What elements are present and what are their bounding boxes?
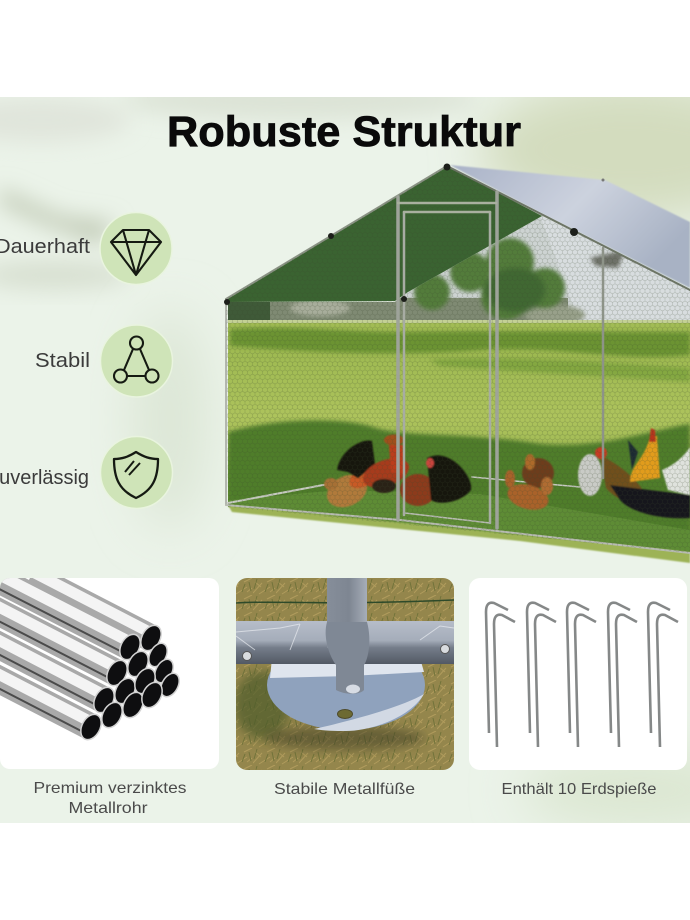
rooster: black and red [400,455,471,506]
stakes [486,603,678,747]
card: ground stakes [469,578,687,798]
icon: shield [100,436,172,508]
card: metal pipes [0,566,219,817]
scenery through the mesh [228,210,690,560]
icon: diamond [100,212,172,284]
feature: Stabil [35,325,172,397]
hen: tan [322,461,382,513]
caption: foot: Stabile Metallfüße [274,781,415,798]
icon: triangle nodes [100,325,172,397]
card: metal foot [234,578,454,798]
door and frame verticals [398,192,603,528]
frame: roof and base tubes [226,166,690,553]
hens: brown pair [505,454,554,514]
roof: silver tarp [450,165,690,288]
pipe bundle [0,566,183,743]
wire mesh [226,166,690,553]
roof: green gable [226,166,542,302]
grass fringe [228,505,690,563]
caption: stakes: Enthält 10 Erdspieße [502,781,657,798]
title: Robuste Struktur [167,108,521,156]
roof clamps [224,164,604,305]
caption: pipes: Metallrohr [68,800,148,817]
label: Stabil: Stabil [35,350,90,372]
chickens: right group [578,428,690,518]
photo: foot on grass [234,578,454,770]
rooster: black tail and red body [337,434,413,493]
feature: Zuverlässig [0,436,172,508]
feature: Dauerhaft [0,212,172,284]
caption: pipes: Premium verzinktes [34,780,186,797]
chicken coop [224,164,690,563]
